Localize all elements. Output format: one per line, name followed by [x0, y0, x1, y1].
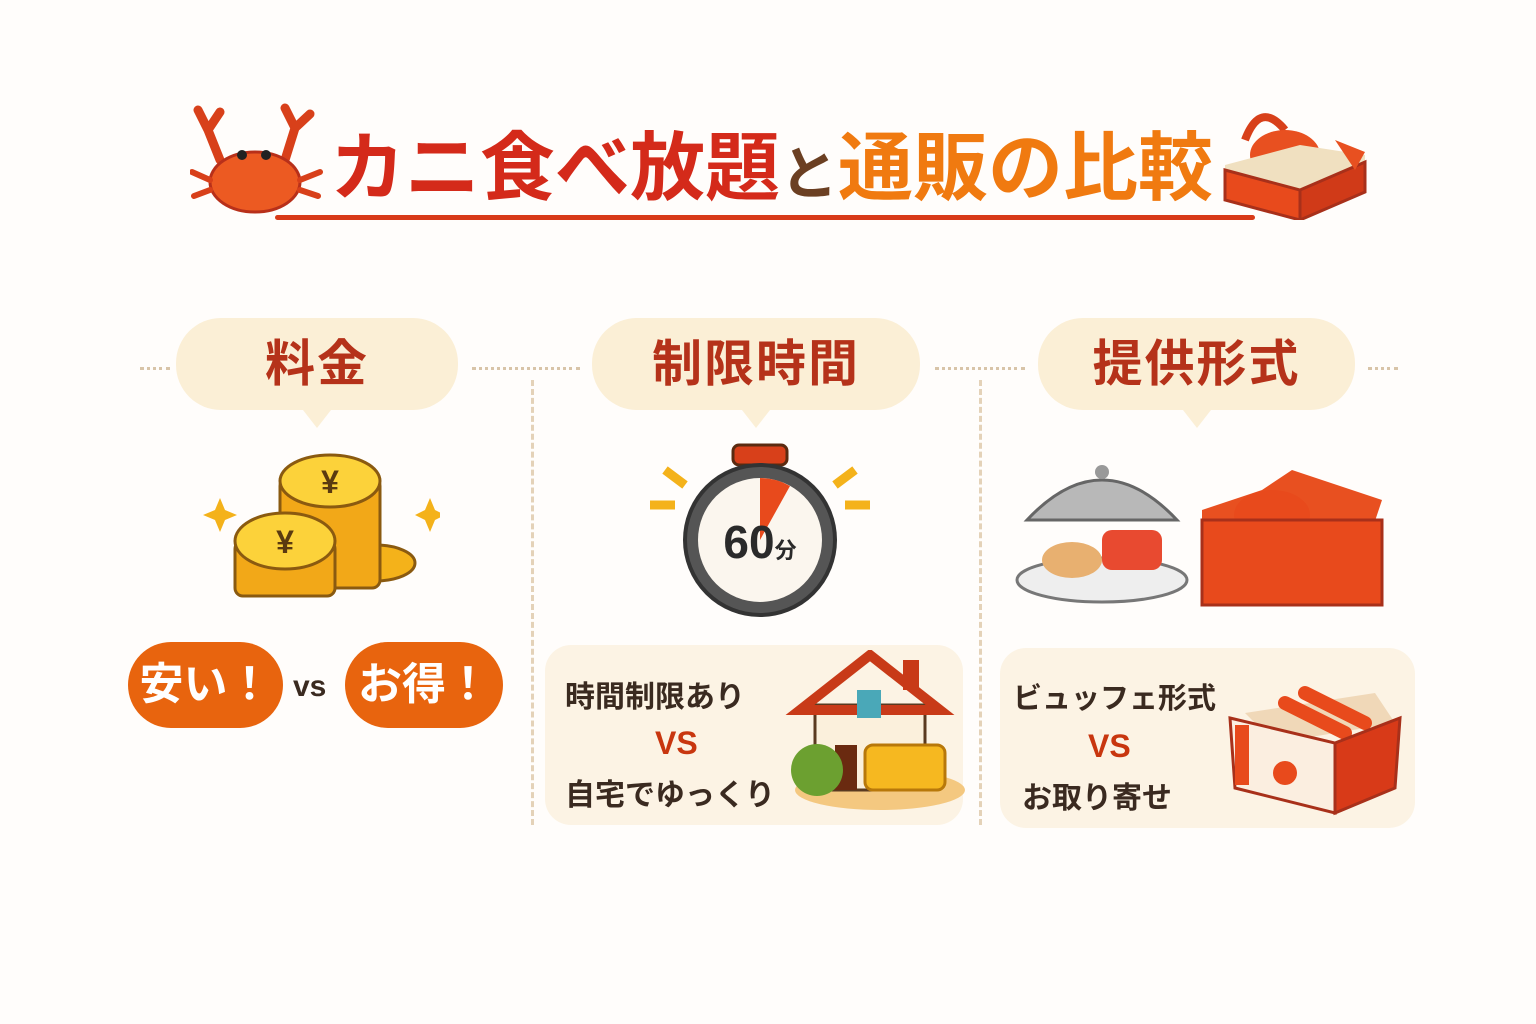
pill: お得！ — [345, 642, 503, 728]
text: ビュッフェ形式: ビュッフェ形式 — [1013, 683, 1216, 715]
heading text: カニ食べ放題と通販の比較 — [330, 126, 1213, 210]
icon: stopwatch 60分: 60分 — [723, 516, 797, 568]
heading: 提供形式 — [1038, 318, 1355, 410]
icon: house with sofa — [786, 650, 965, 810]
icon: yen coins: ¥ — [276, 524, 294, 560]
heading: 制限時間: 制限時間 — [652, 336, 860, 392]
text: お取り寄せ: お取り寄せ — [1022, 782, 1172, 815]
icon: yen coins — [203, 454, 440, 598]
icon: buffet plate and crab box — [1016, 465, 1384, 606]
section: price — [128, 318, 503, 728]
title — [190, 104, 1366, 220]
icon: crab left — [190, 104, 323, 214]
title underline — [275, 215, 1255, 220]
section: time — [545, 318, 965, 825]
icon: yen coins: ¥ — [321, 464, 339, 500]
vs: VS — [655, 725, 698, 761]
vs label: vs — [293, 670, 326, 703]
pill: 安い！ — [128, 642, 283, 728]
panel: ビュッフェ形式 vs お取り寄せ — [1000, 648, 1415, 828]
section: format — [1000, 318, 1415, 828]
panel: 時間制限あり vs 自宅でゆっくり — [545, 645, 963, 825]
vs: VS — [1088, 728, 1131, 764]
heading: 制限時間 — [592, 318, 920, 410]
heading: 料金: 料金 — [265, 336, 369, 392]
pill: 安い！: 安い！ — [140, 660, 272, 709]
heading: 料金 — [176, 318, 458, 410]
text: 時間制限あり: 時間制限あり — [565, 681, 745, 714]
dotted dividers — [140, 367, 170, 370]
pill: お得！: お得！ — [358, 660, 490, 709]
heading: 提供形式: 提供形式 — [1092, 336, 1300, 392]
icon: crab delivery box — [1228, 686, 1402, 816]
icon: crab box right — [1224, 113, 1366, 220]
icon: stopwatch 60分 — [650, 444, 870, 617]
text: 自宅でゆっくり: 自宅でゆっくり — [565, 779, 775, 812]
